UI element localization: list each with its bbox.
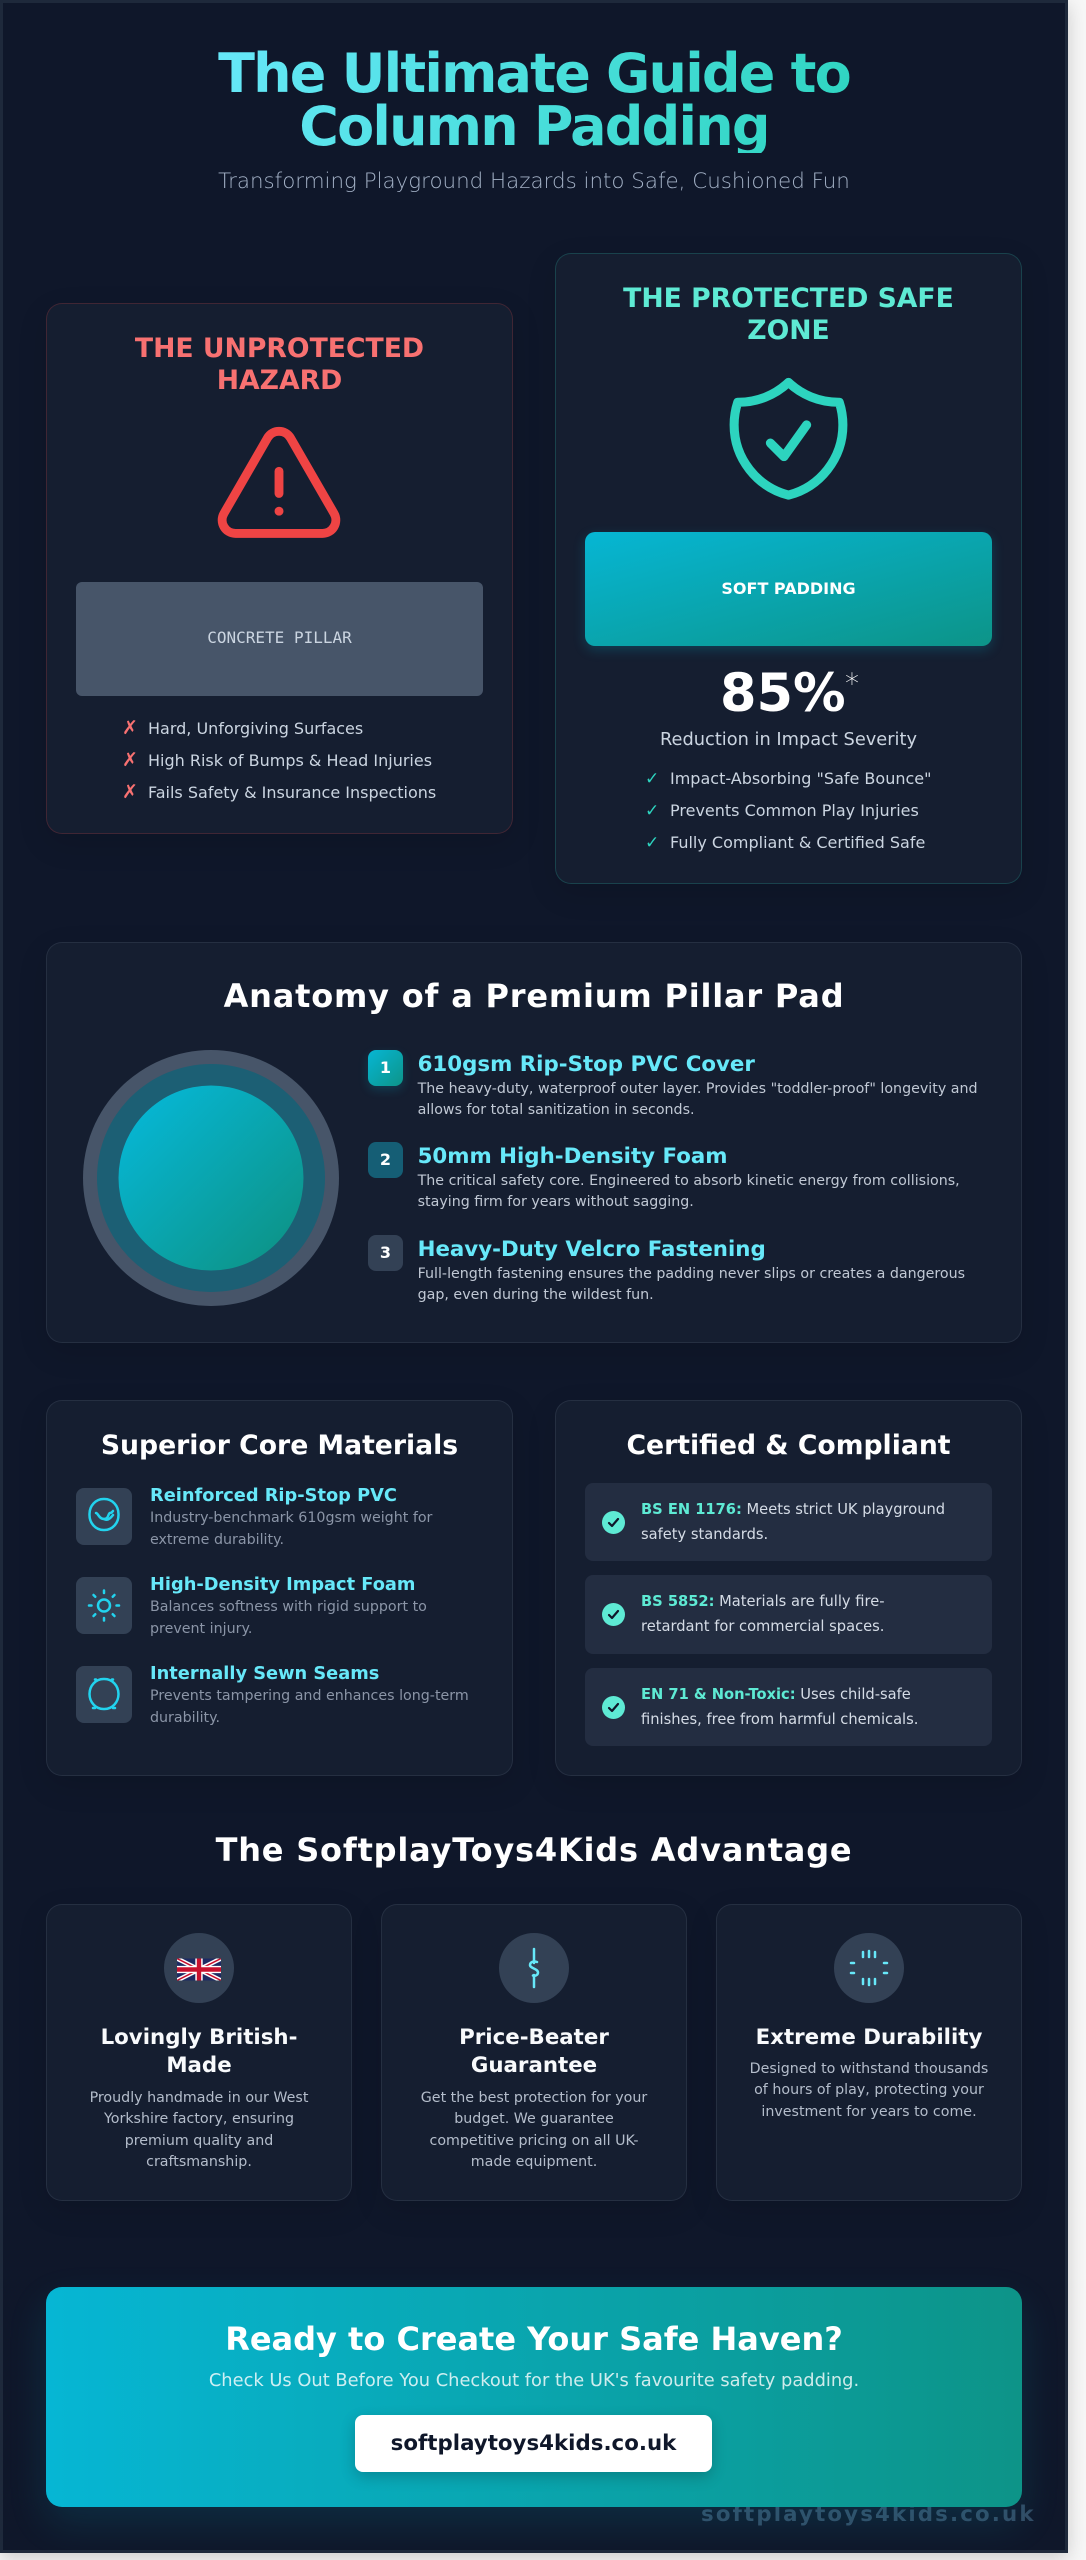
card description: craftsmanship.	[146, 2154, 252, 2170]
card title	[101, 2024, 297, 2078]
layer 1 title: 610gsm Rip-Stop PVC Cover	[418, 1052, 755, 1077]
number badge 2	[368, 1142, 403, 1178]
layer 2 description	[418, 1173, 960, 1210]
card description: Yorkshire factory, ensuring	[104, 2111, 294, 2127]
call to action banner	[46, 2287, 1022, 2507]
hazard list: ✗	[122, 781, 138, 803]
certification text: retardant for commercial spaces.	[641, 1618, 884, 1635]
number badge 1: 1	[380, 1058, 391, 1077]
header title: Column Padding	[299, 95, 769, 158]
panel: superior core materials	[46, 1400, 513, 1776]
certification text: BS EN 1176: Meets strict UK playground	[641, 1501, 945, 1518]
card description: of hours of play, protecting your	[754, 2082, 984, 2098]
panel: certified and compliant	[555, 1400, 1022, 1776]
certification: BS EN 1176	[585, 1483, 992, 1561]
layer 1 description: allows for total sanitization in seconds.	[418, 1102, 695, 1118]
layer 3 description	[418, 1266, 965, 1303]
material description: Prevents tampering and enhances long-term	[150, 1688, 469, 1704]
layer 3	[368, 1235, 965, 1303]
layer 2	[368, 1142, 960, 1210]
soft padding block	[585, 532, 992, 646]
card description	[421, 2090, 648, 2170]
material description	[150, 1688, 469, 1726]
icon: durability dashes	[834, 1933, 904, 2003]
number badge 3: 3	[380, 1243, 391, 1262]
stat: 85 percent: 85%	[720, 663, 846, 724]
CTA button	[355, 2415, 712, 2472]
number badge 2: 2	[380, 1150, 391, 1169]
safe list: Prevents Common Play Injuries	[670, 801, 919, 820]
card description: investment for years to come.	[761, 2104, 977, 2120]
material description: Industry-benchmark 610gsm weight for	[150, 1510, 432, 1526]
safe list: Fully Compliant & Certified Safe	[670, 833, 925, 852]
safe list	[645, 769, 931, 853]
card title: Extreme Durability	[756, 2024, 982, 2050]
CTA button: softplaytoys4kids.co.uk	[391, 2431, 676, 2456]
concrete pillar block: CONCRETE PILLAR	[207, 628, 352, 647]
card description: premium quality and	[125, 2133, 273, 2149]
card description: competitive pricing on all UK-	[430, 2133, 638, 2149]
card description: Get the best protection for your	[421, 2090, 647, 2106]
advantage heading: The SoftplayToys4Kids Advantage	[216, 1831, 852, 1869]
panel: protected safe zone	[555, 253, 1022, 884]
stat: 85 percent: *	[845, 667, 859, 700]
icon: seam ring	[76, 1666, 132, 1723]
number badge 3	[368, 1235, 403, 1271]
layer 2 title: 50mm High-Density Foam	[418, 1144, 727, 1169]
card description: made equipment.	[471, 2154, 597, 2170]
material description	[150, 1510, 432, 1548]
certified heading: Certified & Compliant	[626, 1430, 951, 1461]
layer 1 description: The heavy-duty, waterproof outer layer. Provides "toddler-proof" longevity and	[418, 1081, 978, 1097]
material title: High-Density Impact Foam	[150, 1574, 415, 1595]
safe list: ✓	[645, 833, 659, 853]
card description	[90, 2090, 308, 2170]
diagram: pad cross-section	[83, 1050, 339, 1306]
header title: The Ultimate Guide to	[218, 42, 850, 105]
card description	[750, 2061, 988, 2120]
anatomy heading: Anatomy of a Premium Pillar Pad	[224, 977, 844, 1015]
safe list: ✓	[645, 801, 659, 821]
icon: shield check	[730, 378, 848, 500]
safe list: Impact-Absorbing "Safe Bounce"	[670, 769, 931, 788]
safe list: ✓	[645, 769, 659, 789]
certification: EN 71	[585, 1668, 992, 1746]
hazard list: Hard, Unforgiving Surfaces	[148, 719, 363, 738]
panel: price-beater guarantee	[381, 1904, 687, 2201]
hazard list: Fails Safety & Insurance Inspections	[148, 783, 436, 802]
concrete pillar block	[76, 582, 483, 696]
hazard list	[122, 717, 436, 803]
card description: budget. We guarantee	[454, 2111, 614, 2127]
material title: Reinforced Rip-Stop PVC	[150, 1485, 397, 1506]
CTA heading: Ready to Create Your Safe Haven?	[225, 2320, 843, 2358]
icon: pound sign	[499, 1933, 569, 2003]
hazard list: ✗	[122, 717, 138, 739]
material description: Balances softness with rigid support to	[150, 1599, 427, 1615]
material: rip-stop PVC	[76, 1485, 432, 1548]
layer 3 description: gap, even during the wildest fun.	[418, 1287, 654, 1303]
hazard heading: THE UNPROTECTED	[135, 332, 424, 364]
certification text	[641, 1686, 918, 1728]
material description	[150, 1599, 427, 1637]
soft padding block: SOFT PADDING	[721, 579, 856, 598]
stat caption: Reduction in Impact Severity	[660, 729, 917, 750]
material: sewn seams	[76, 1663, 469, 1726]
layer 2 description: The critical safety core. Engineered to absorb kinetic energy from collisions,	[418, 1173, 960, 1189]
hazard heading	[135, 332, 424, 396]
number badge 1	[368, 1050, 403, 1086]
card title: Price-Beater	[459, 2024, 609, 2050]
hazard heading: HAZARD	[217, 364, 342, 396]
certification text	[641, 1501, 945, 1543]
safe zone heading: ZONE	[747, 314, 830, 346]
icon: check badge	[602, 1696, 625, 1719]
panel: extreme durability	[716, 1904, 1022, 2201]
layer 3 title: Heavy-Duty Velcro Fastening	[418, 1237, 766, 1262]
card title: Guarantee	[471, 2053, 597, 2078]
hazard list: High Risk of Bumps & Head Injuries	[148, 751, 432, 770]
materials heading: Superior Core Materials	[101, 1430, 458, 1461]
panel: British-made	[46, 1904, 352, 2201]
material: impact foam	[76, 1574, 427, 1637]
icon: warning triangle	[218, 426, 340, 538]
material description: durability.	[150, 1710, 220, 1726]
material title: Internally Sewn Seams	[150, 1663, 379, 1684]
card title: Made	[166, 2053, 232, 2078]
header title	[214, 47, 854, 153]
card title	[459, 2024, 609, 2078]
certification text: BS 5852: Materials are fully fire-	[641, 1593, 885, 1610]
icon: check badge	[602, 1603, 625, 1626]
material description: prevent injury.	[150, 1621, 252, 1637]
hazard list: ✗	[122, 749, 138, 771]
certification: BS 5852	[585, 1575, 992, 1654]
layer 3 description: Full-length fastening ensures the padding never slips or creates a dangerous	[418, 1266, 965, 1282]
icon: rip-stop	[76, 1488, 132, 1545]
certification text: EN 71 & Non-Toxic: Uses child-safe	[641, 1686, 911, 1703]
panel: unprotected hazard	[46, 303, 513, 834]
icon: UK flag	[164, 1933, 234, 2003]
icon: foam burst	[76, 1577, 132, 1634]
certification text	[641, 1593, 885, 1635]
certification text: safety standards.	[641, 1526, 768, 1543]
layer 2 description: staying firm for years without sagging.	[418, 1194, 694, 1210]
safe zone heading: THE PROTECTED SAFE	[623, 282, 954, 314]
safe zone heading	[623, 282, 954, 346]
icon: check badge	[602, 1511, 625, 1534]
layer 1	[365, 1050, 978, 1118]
panel: anatomy of a pillar pad	[46, 942, 1022, 1343]
layer 1 description	[418, 1081, 978, 1118]
card description: Designed to withstand thousands	[750, 2061, 988, 2077]
subtitle: Transforming Playground Hazards into Safe, Cushioned Fun	[218, 168, 850, 194]
card description: Proudly handmade in our West	[90, 2090, 308, 2106]
card title: Lovingly British-	[101, 2024, 297, 2050]
material description: extreme durability.	[150, 1532, 284, 1548]
CTA subtext: Check Us Out Before You Checkout for the UK's favourite safety padding.	[209, 2370, 859, 2391]
watermark: softplaytoys4kids.co.uk	[701, 2502, 1036, 2527]
certification text: finishes, free from harmful chemicals.	[641, 1711, 918, 1728]
